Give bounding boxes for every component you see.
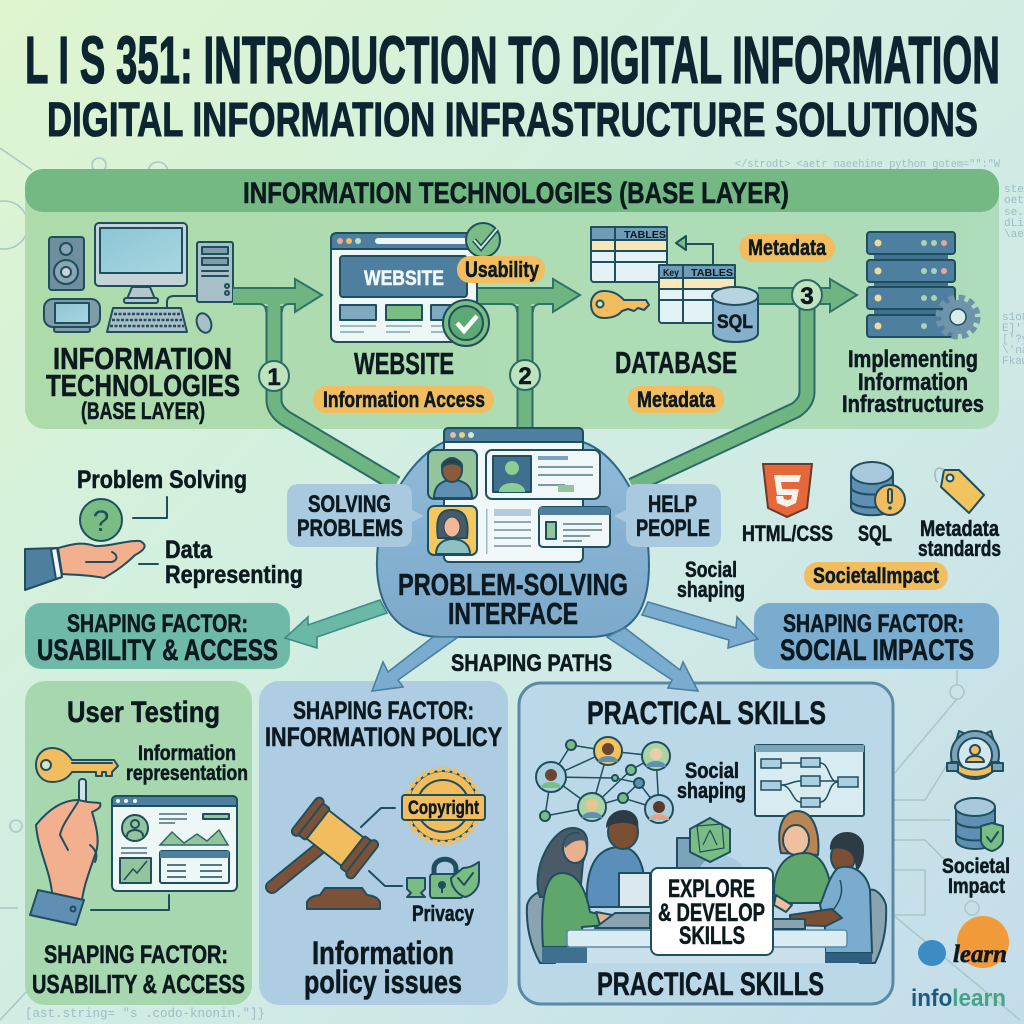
- avatar: man: [428, 450, 477, 499]
- bubble: solving problems: [287, 484, 424, 547]
- man on right: [790, 832, 872, 963]
- bubble: solving problems: SOLVING: [308, 491, 391, 518]
- icon: database shield: [955, 798, 1003, 851]
- people collaborating: [527, 810, 886, 963]
- box: shaping factor usability and access: [25, 603, 290, 669]
- left group: problem solving and data representing: [25, 466, 303, 590]
- man seated behind: [587, 810, 650, 907]
- blob: [377, 442, 649, 637]
- woman on right: [774, 811, 832, 912]
- label: social shaping: Social: [685, 557, 737, 582]
- label: website: WEBSITE: [354, 346, 454, 381]
- icon: dashboard window: [112, 796, 237, 891]
- icon: server rack with gear: [867, 232, 977, 337]
- label: database: DATABASE: [615, 345, 737, 380]
- arrow 1: technologies to website: [233, 279, 396, 484]
- icon: question circle: ?: [93, 505, 109, 538]
- tools group: [742, 462, 1001, 590]
- arrow 2: website to database: [477, 279, 580, 430]
- background code text: se.: [1004, 207, 1024, 219]
- woman on left: [538, 828, 618, 963]
- bubble: help people: PEOPLE: [636, 515, 710, 542]
- panel: practical skills: Social: [685, 758, 739, 783]
- label: shaping paths: SHAPING PATHS: [451, 650, 612, 677]
- icon: database tables: [591, 227, 735, 323]
- icon: check badges: [443, 223, 500, 346]
- icon: copyright seal: [402, 769, 485, 843]
- arrow: to practical skills: [607, 628, 698, 691]
- arrow: to information policy: [372, 637, 458, 691]
- icon: website window: WEBSITE: [364, 267, 444, 290]
- mini window card: [539, 507, 610, 547]
- tools group: SQL: [858, 521, 892, 546]
- icon: sql cylinder: [712, 287, 758, 342]
- panel: information policy: INFORMATION POLICY: [265, 722, 502, 752]
- arrow: to usability and access: [285, 600, 387, 648]
- laptop left: [595, 913, 650, 928]
- icon: sql database warning: [851, 462, 905, 515]
- central problem-solving interface: [287, 428, 721, 637]
- background code text: ste: [1004, 184, 1024, 196]
- icon: open hand: [25, 541, 145, 590]
- icon: key: [591, 291, 649, 318]
- label: information technologies: [46, 341, 240, 425]
- right column: societal impact icons: [942, 731, 1010, 898]
- arrow 1: technologies to website: 1: [267, 364, 281, 391]
- label: implementing information infrastructures: Infrastructures: [842, 391, 984, 418]
- logo: learn and infolearn: infolearn: [911, 985, 1006, 1012]
- icon: metadata tag: [935, 468, 984, 513]
- bubble: solving problems: PROBLEMS: [297, 515, 403, 542]
- logo: learn and infolearn: [911, 916, 1009, 1012]
- callout: explore and develop skills: SKILLS: [679, 922, 745, 950]
- logo: learn and infolearn: learn: [953, 941, 1007, 968]
- pill: metadata bottom: Metadata: [637, 387, 716, 412]
- box: shaping factor usability and access: USABILITY & ACCESS: [37, 634, 278, 667]
- callout: explore and develop skills: & DEVELOP: [658, 899, 765, 927]
- icon: question circle: [80, 499, 122, 541]
- panel: information policy: [259, 681, 508, 1005]
- panel: information policy: Information: [312, 935, 454, 971]
- icon: person badge: [947, 731, 1003, 779]
- background computer and cube: [677, 818, 742, 868]
- callout: explore and develop skills: [651, 868, 773, 955]
- label: information technologies: INFORMATION: [53, 341, 232, 376]
- background code text: \ae: [1004, 229, 1024, 241]
- icon: gold key: [36, 748, 118, 782]
- heading: problem-solving interface: INTERFACE: [448, 596, 578, 631]
- pill: information access: Information Access: [323, 387, 485, 412]
- label: information technologies: TECHNOLOGIES: [46, 368, 240, 403]
- panel: user testing: SHAPING FACTOR:: [44, 941, 228, 969]
- icon: hand holding key: [30, 779, 100, 925]
- arrow 3: database to infrastructures: [632, 279, 857, 486]
- icon: html5 shield: [763, 464, 812, 517]
- pill: usability: Usability: [465, 257, 540, 282]
- profile card: [486, 450, 600, 499]
- arrow: to social impacts: [642, 602, 758, 648]
- panel: user testing: [25, 681, 252, 1005]
- panel: user testing: Information: [138, 742, 236, 765]
- chairs: [527, 890, 886, 963]
- browser window: [444, 428, 583, 562]
- label: social shaping: [677, 557, 745, 602]
- panel header: INFORMATION TECHNOLOGIES (BASE LAYER): [243, 177, 789, 210]
- right column: societal impact icons: Societal: [942, 855, 1010, 878]
- table: [567, 919, 847, 963]
- callout: explore and develop skills: EXPLORE: [668, 875, 755, 903]
- label: information technologies: (BASE LAYER): [81, 398, 205, 425]
- heading: problem-solving interface: [398, 567, 628, 631]
- box: shaping factor usability and access: SHAPING FACTOR:: [67, 610, 248, 638]
- panel header: [25, 169, 999, 212]
- flow diagram window: [755, 745, 864, 816]
- pill: societal impact: SocietalImpact: [813, 563, 940, 588]
- panel: user testing: USABILITY & ACCESS: [32, 969, 245, 999]
- icon: website window: [331, 233, 477, 342]
- left group: problem solving and data representing: Data: [165, 536, 213, 564]
- background code text: oet: [1004, 195, 1024, 207]
- label: implementing information infrastructures: [842, 346, 984, 418]
- label: implementing information infrastructures: Implementing: [848, 346, 978, 373]
- panel: practical skills: PRACTICAL SKILLS: [587, 695, 826, 731]
- pill: metadata top: Metadata: [748, 235, 827, 260]
- panel: practical skills: [519, 683, 893, 1004]
- label: social shaping: shaping: [677, 577, 745, 602]
- title: [25, 23, 1000, 147]
- panel: user testing: representation: [126, 762, 248, 785]
- panel: practical skills: PRACTICAL SKILLS: [597, 966, 824, 1002]
- label: implementing information infrastructures: Information: [858, 369, 968, 396]
- panel: information policy: SHAPING FACTOR:: [293, 697, 474, 725]
- network of people: [536, 737, 673, 823]
- background code text: </strodt> <aetr naeehine python gotem="":"W: [735, 159, 1000, 171]
- arrow 3: database to infrastructures: 3: [800, 283, 814, 310]
- arrow 2: website to database: 2: [518, 363, 532, 390]
- panel: information technologies base layer: [25, 169, 999, 486]
- icon: database tables: TABLES: [624, 230, 666, 241]
- icon: database tables: Key: [663, 268, 679, 279]
- background code text: [ast.string= "s .codo-knonin."]}: [25, 1007, 265, 1021]
- background code text: dLi: [1004, 218, 1024, 230]
- bubble: help people: HELP: [648, 491, 697, 518]
- icon: gavel: [272, 796, 380, 909]
- panel: user testing: User Testing: [67, 696, 220, 729]
- icon: copyright seal: Copyright: [408, 798, 480, 819]
- left group: problem solving and data representing: Representing: [165, 561, 303, 589]
- right column: societal impact icons: Impact: [948, 875, 1005, 898]
- icon: database tables: TABLES: [691, 268, 733, 279]
- avatar: woman: [428, 506, 477, 555]
- box: shaping factor social impacts: SHAPING FACTOR:: [783, 610, 964, 638]
- panel: practical skills: shaping: [677, 778, 746, 803]
- panel: information policy: policy issues: [304, 964, 462, 1000]
- bubble: help people: [614, 484, 721, 547]
- icon: computer set: [44, 223, 233, 335]
- left group: problem solving and data representing: Problem Solving: [77, 466, 247, 494]
- panel: information policy: Privacy: [412, 901, 475, 926]
- box: shaping factor social impacts: [754, 603, 999, 669]
- tools group: standards: [918, 536, 1001, 561]
- tools group: Metadata: [920, 516, 1000, 541]
- icon: sql cylinder: SQL: [717, 312, 753, 333]
- heading: problem-solving interface: PROBLEM-SOLVING: [398, 567, 628, 602]
- icon: privacy lock and shield: [407, 859, 479, 898]
- tools group: HTML/CSS: [742, 521, 833, 546]
